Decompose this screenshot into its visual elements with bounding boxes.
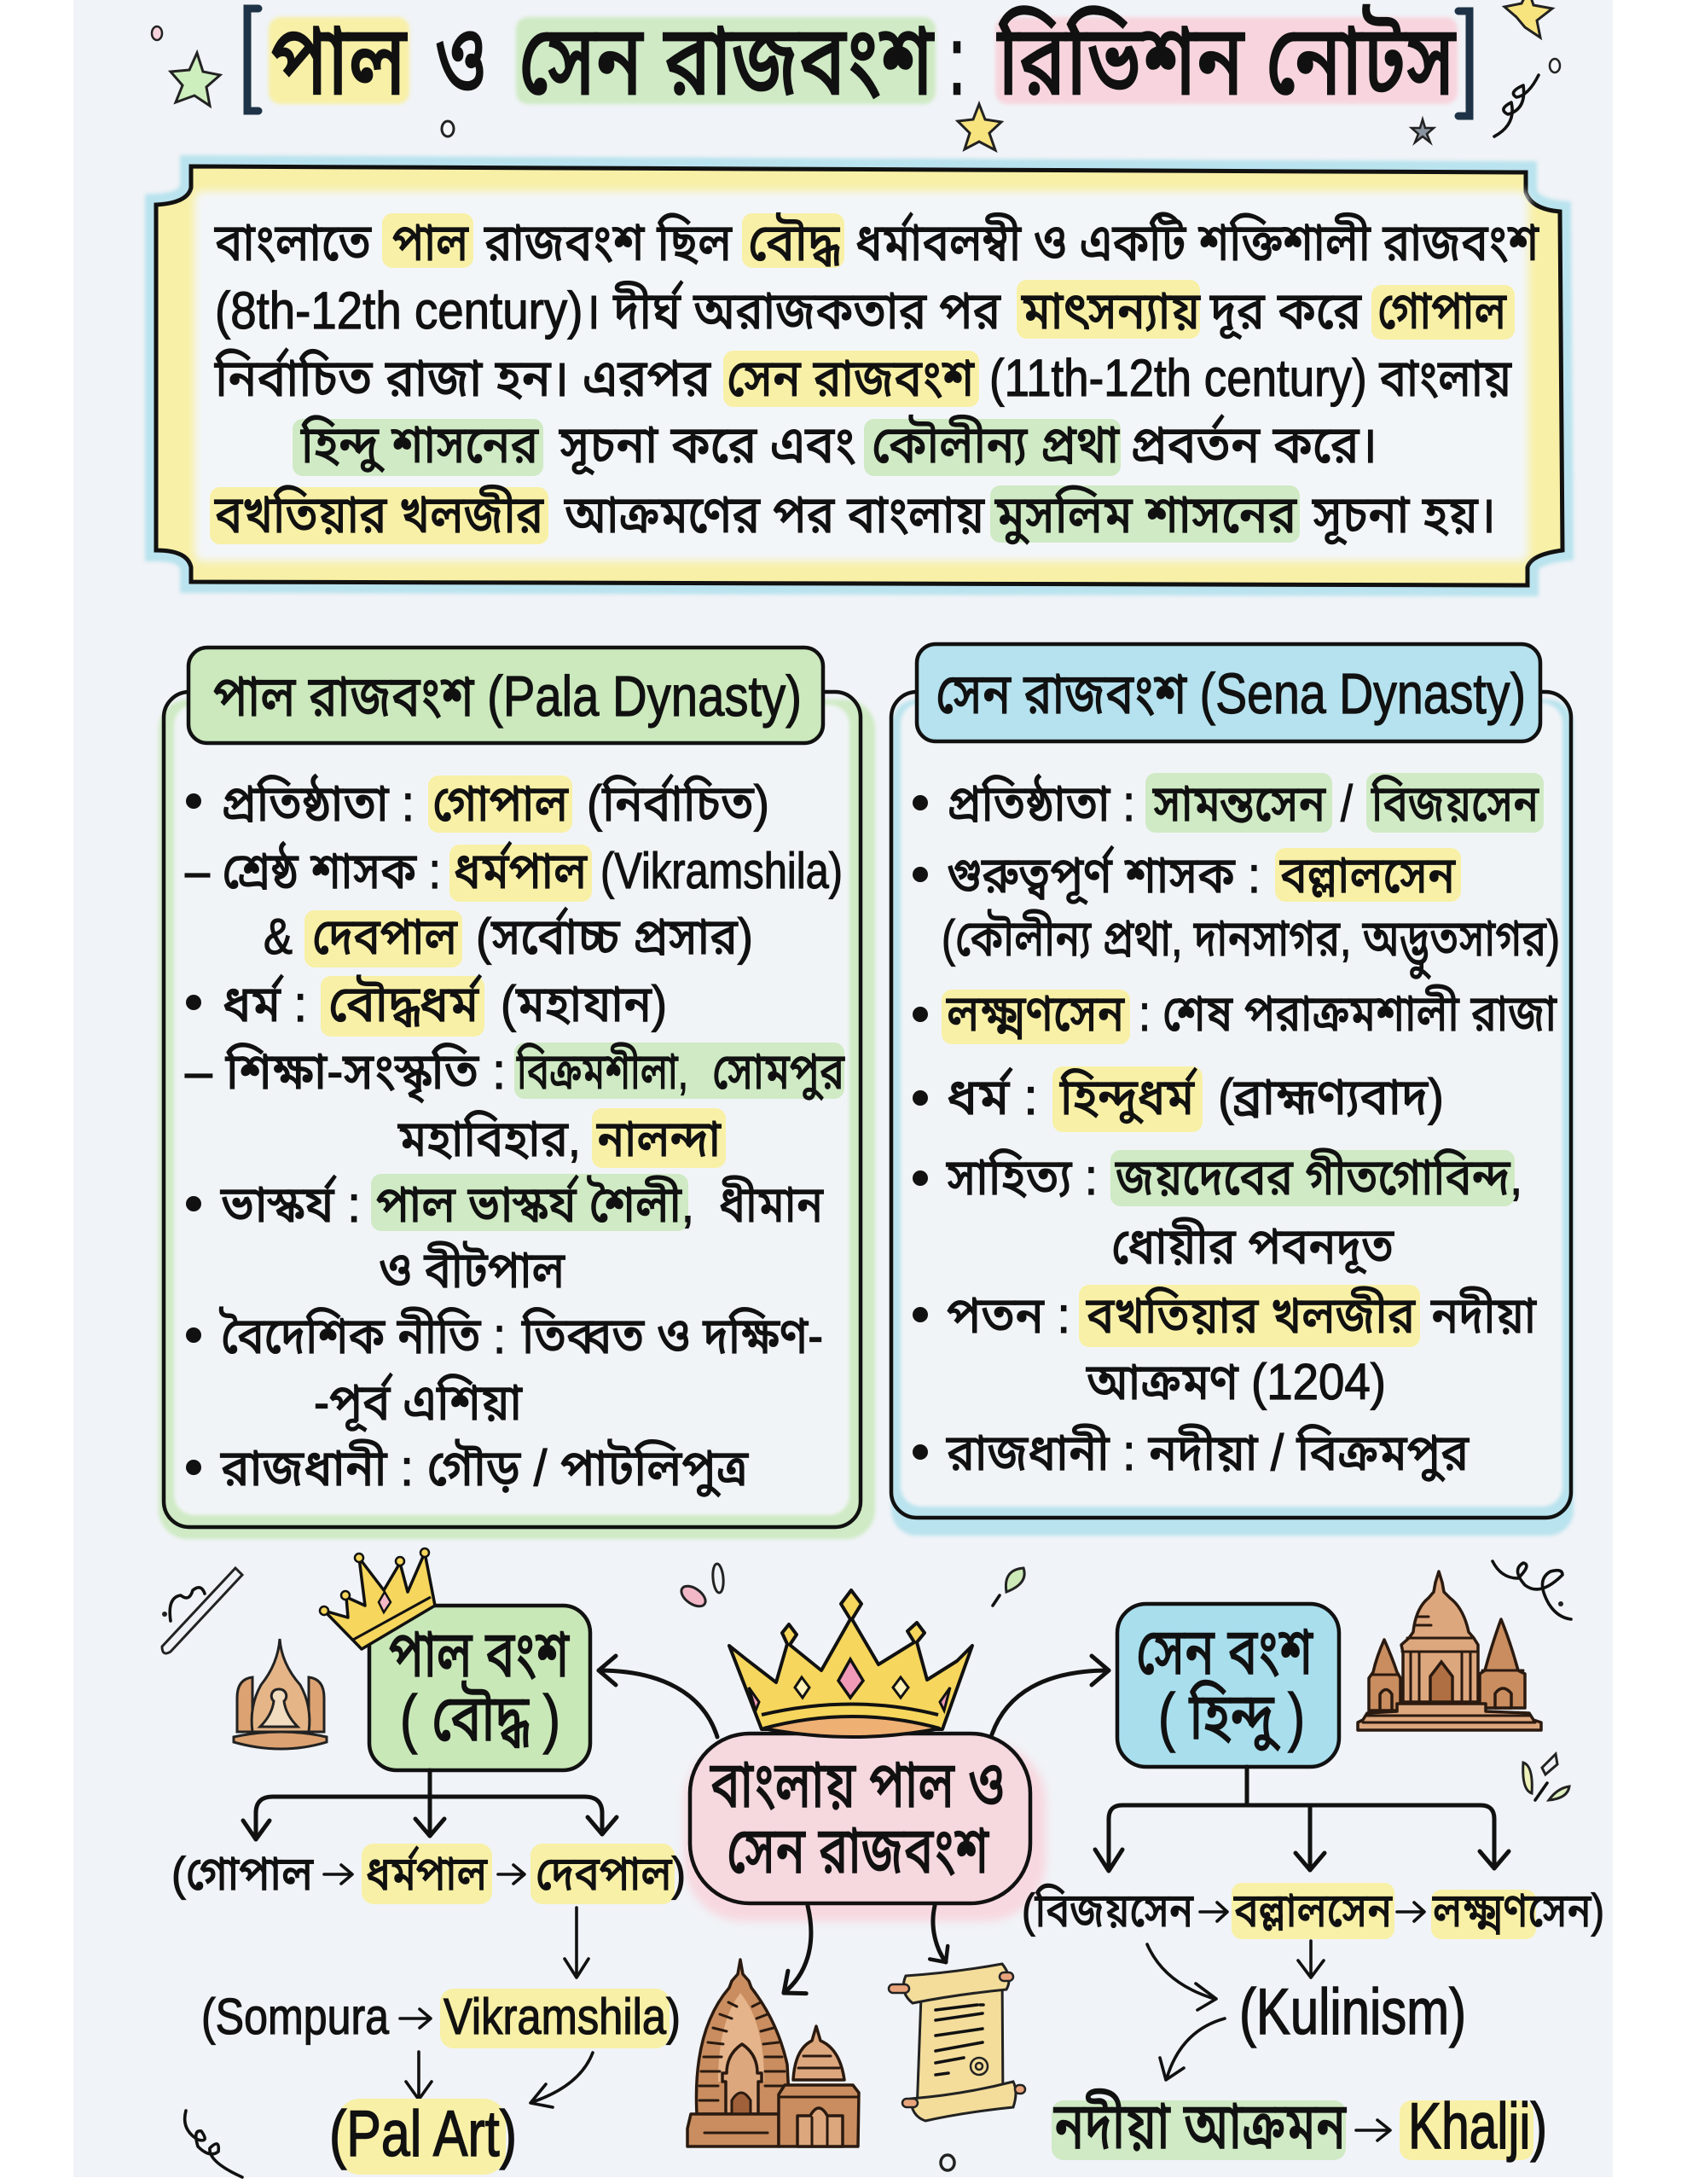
Pala: founder: গোপাল <box>432 775 569 832</box>
Sena: downfall: বখতিয়ার খলজীর <box>1086 1287 1416 1344</box>
Pala: rulers <box>185 841 843 967</box>
Sena: Lakshmanasena <box>913 985 1557 1044</box>
node: Sena box <box>1117 1604 1339 1767</box>
Pala: rulers: ধর্মপাল <box>454 841 588 899</box>
icon: pink petals <box>678 1564 724 1611</box>
flow: Pal Art: (Pal Art) <box>329 2098 517 2170</box>
intro line 2: (8th-12th century)। দীর্ঘ অরাজকতার পর <box>215 280 1001 340</box>
intro line 2: মাৎসন্যায় <box>1021 282 1201 340</box>
arrow: Devapala to Vikramshila <box>565 1908 588 1978</box>
intro line 5: বখতিয়ার খলজীর <box>214 485 544 543</box>
icon: small crown <box>320 1548 435 1649</box>
Sena: key ruler: গুরুত্বপূর্ণ শাসক : <box>947 845 1261 905</box>
intro line 3: সেন রাজবংশ <box>727 349 975 407</box>
arrow: Vikramshila to Pal Art <box>530 2053 593 2107</box>
Sena: founder: সামন্তসেন <box>1152 775 1326 832</box>
icon: top-right squiggle <box>1493 1561 1571 1619</box>
flow: Pala branches <box>243 1770 602 1839</box>
Sena: downfall: আক্রমণ (1204) <box>1086 1354 1386 1410</box>
arrow: Sompura to Pal Art <box>406 2052 432 2100</box>
Pala: education: নালন্দা <box>596 1111 722 1167</box>
icon: small leaf <box>993 1568 1024 1606</box>
Pala: education <box>185 1043 845 1168</box>
Pala: religion: ধর্ম : <box>223 974 307 1032</box>
Pala: foreign policy: -পূর্ব এশিয়া <box>314 1373 523 1432</box>
flow: Pala rulers line: ধর্মপাল <box>366 1846 488 1900</box>
Sena: founder: / <box>1341 775 1354 832</box>
flow: Nadia invasion to Khalji: নদীয়া আক্রমন <box>1053 2089 1347 2163</box>
Pala: education: – শিক্ষা-সংস্কৃতি : <box>185 1043 506 1103</box>
Pala: sculpture: ও বীটপাল <box>379 1241 565 1298</box>
icon: title stars and doodles <box>152 0 1560 150</box>
node: Pala box: পাল বংশ <box>389 1618 570 1691</box>
Pala header: পাল রাজবংশ (Pala Dynasty) <box>213 665 802 729</box>
Pala: founder: (নির্বাচিত) <box>587 774 769 832</box>
panel: Sena dynasty <box>891 644 1574 1536</box>
intro line 4: প্রবর্তন করে। <box>1130 414 1377 473</box>
Sena: religion: ধর্ম : <box>947 1067 1038 1125</box>
Pala: sculpture: পাল ভাস্কর্য শৈলী, <box>376 1175 694 1233</box>
intro line 1 <box>214 212 1539 271</box>
mind map centre node: বাংলায় পাল ও <box>710 1749 1005 1821</box>
flow: Pala rulers line: (গোপাল <box>171 1847 314 1900</box>
Pala: rulers: (সর্বোচ্চ প্রসার) <box>476 907 753 965</box>
flow: Kulinism: (Kulinism) <box>1239 1976 1466 2048</box>
mind map centre node: সেন রাজবংশ <box>727 1815 989 1887</box>
title: : <box>948 7 965 115</box>
node: Pala box <box>369 1606 590 1770</box>
flow: Sompura to Vikramshila: Vikramshila) <box>443 1989 681 2045</box>
title: সেন রাজবংশ <box>519 7 934 115</box>
Sena: religion <box>913 1066 1444 1132</box>
arrow: centre to Sena <box>992 1670 1109 1734</box>
arrow: centre to Pala <box>599 1670 717 1737</box>
Sena: founder <box>913 773 1544 833</box>
Sena: downfall: নদীয়া <box>1430 1287 1537 1344</box>
intro line 1: বৌদ্ধ <box>748 212 840 271</box>
icon: stupa <box>234 1639 327 1749</box>
title: পাল <box>271 7 407 115</box>
Sena: downfall <box>913 1285 1537 1410</box>
Pala: foreign policy: বৈদেশিক নীতি : <box>219 1307 506 1364</box>
Pala: religion <box>186 974 667 1037</box>
node: Pala box: ( বৌদ্ধ ) <box>400 1682 560 1755</box>
Sena: key ruler: (কৌলীন্য প্রথা, দানসাগর, অদ্ভুতসাগর) <box>942 909 1560 979</box>
intro line 1: বাংলাতে <box>214 213 372 271</box>
Pala: founder: প্রতিষ্ঠাতা : <box>221 774 415 832</box>
Sena header: সেন রাজবংশ (Sena Dynasty) <box>936 662 1526 726</box>
arrow: centre to scroll <box>933 1906 946 1962</box>
Pala: sculpture <box>186 1174 824 1298</box>
Sena: Lakshmanasena: : শেষ পরাক্রমশালী রাজা <box>1139 985 1557 1042</box>
Pala: rulers: & <box>264 909 293 965</box>
Sena header <box>917 644 1540 741</box>
title <box>247 5 1470 116</box>
icon: large crown <box>729 1590 972 1737</box>
Pala: foreign policy: তিব্বত ও দক্ষিণ- <box>521 1307 823 1364</box>
Sena: literature: জয়দেবের গীতগোবিন্দ, <box>1115 1148 1522 1205</box>
flow: Nadia invasion to Khalji: Khalji) <box>1408 2090 1547 2163</box>
flow: Sena branches <box>1095 1767 1494 1871</box>
Sena: literature <box>913 1148 1522 1275</box>
Sena: key ruler: বল্লালসেন <box>1279 847 1456 903</box>
Sena: religion: (ব্রাহ্মণ্যবাদ) <box>1218 1069 1444 1125</box>
intro line 5 <box>210 485 1496 545</box>
Pala: founder <box>186 774 769 833</box>
Pala: foreign policy <box>186 1307 823 1432</box>
flow: Sena rulers line: বল্লালসেন <box>1233 1884 1393 1937</box>
icon: temple right <box>1358 1571 1541 1730</box>
intro line 3: (11th-12th century) বাংলায় <box>989 349 1512 407</box>
intro line 1: ধর্মাবলম্বী ও একটি শক্তিশালী রাজবংশ <box>855 212 1539 271</box>
arrow: centre to temple <box>784 1906 811 1993</box>
Pala: sculpture: ধীমান <box>719 1176 824 1233</box>
panel: introduction <box>156 166 1562 585</box>
intro line 5: আক্রমণের পর বাংলায় <box>564 485 985 543</box>
flow: Sena rulers line <box>1022 1883 1604 1939</box>
arrow: Vijayasena to Kulinism <box>1147 1944 1216 2010</box>
Sena: founder: বিজয়সেন <box>1371 775 1539 832</box>
intro line 2: গোপাল <box>1377 282 1507 340</box>
Sena: founder: প্রতিষ্ঠাতা : <box>947 774 1135 832</box>
icon: bottom-left squiggle <box>185 2111 242 2177</box>
icon: temple near centre <box>687 1960 859 2146</box>
Pala: rulers: – শ্রেষ্ঠ শাসক : <box>185 841 441 899</box>
icon: leaves <box>1523 1754 1569 1800</box>
icon: bottom circle <box>941 2155 954 2170</box>
Sena: religion: হিন্দুধর্ম <box>1059 1067 1197 1125</box>
Pala: sculpture: ভাস্কর্য : <box>220 1175 361 1233</box>
node: Sena box: ( হিন্দু ) <box>1158 1681 1305 1753</box>
intro line 4: কৌলীন্য প্রথা <box>872 415 1120 473</box>
intro line 4 <box>293 414 1377 476</box>
node: Sena box: সেন বংশ <box>1136 1616 1313 1688</box>
intro line 2 <box>215 280 1515 340</box>
intro line 4: সূচনা করে এবং <box>559 415 855 475</box>
intro line 4: হিন্দু শাসনের <box>300 415 539 473</box>
flow: Pala rulers line <box>171 1844 686 1904</box>
intro line 3 <box>214 347 1512 407</box>
arrow: Ballalasena to Kulinism <box>1298 1941 1324 1978</box>
Pala: rulers: (Vikramshila) <box>600 843 843 899</box>
flow: Sena rulers line: (বিজয়সেন <box>1022 1884 1194 1937</box>
Pala: education: সোমপুর <box>712 1043 845 1101</box>
Pala: capital: রাজধানী : গৌড় / পাটলিপুত্র <box>220 1439 749 1497</box>
flow: Sompura to Vikramshila: (Sompura <box>201 1989 389 2045</box>
intro line 2: দূর করে <box>1209 282 1362 340</box>
Pala: education: মহাবিহার, <box>397 1110 581 1167</box>
arrow: Kulinism to Nadia <box>1160 2018 1225 2080</box>
mind map centre node <box>684 1734 1046 1921</box>
intro line 1: রাজবংশ ছিল <box>484 213 733 271</box>
icon: scroll <box>889 1964 1025 2121</box>
flow: Pala rulers line: দেবপাল) <box>536 1847 686 1900</box>
Pala header <box>188 648 823 743</box>
intro line 3: নির্বাচিত রাজা হন। এরপর <box>214 347 711 407</box>
title: রিভিশন নোটস <box>996 5 1457 115</box>
panel: Pala dynasty <box>159 648 875 1539</box>
Sena: Lakshmanasena: লক্ষ্মণসেন <box>946 985 1125 1042</box>
Sena: capital: রাজধানী : নদীয়া / বিক্রমপুর <box>946 1424 1470 1482</box>
flow: Sena rulers line: লক্ষ্মণসেন) <box>1432 1884 1604 1937</box>
intro line 1: পাল <box>392 213 469 271</box>
Sena: key ruler <box>913 845 1560 979</box>
Pala: rulers: দেবপাল <box>312 909 458 965</box>
Pala: education: বিক্রমশীলা, <box>516 1043 688 1100</box>
flow: Sompura to Vikramshila <box>201 1989 681 2048</box>
intro line 5: সূচনা হয়। <box>1312 485 1496 545</box>
Sena: literature: ধোয়ীর পবনদূত <box>1111 1217 1394 1275</box>
Pala: religion: বৌদ্ধধর্ম <box>328 974 482 1032</box>
intro line 5: মুসলিম শাসনের <box>994 485 1297 545</box>
Pala: religion: (মহাযান) <box>501 976 667 1032</box>
icon: brush doodle <box>162 1568 242 1653</box>
Sena: literature: সাহিত্য : <box>946 1148 1098 1205</box>
Sena: downfall: পতন : <box>947 1287 1070 1344</box>
title: ও <box>435 7 486 115</box>
